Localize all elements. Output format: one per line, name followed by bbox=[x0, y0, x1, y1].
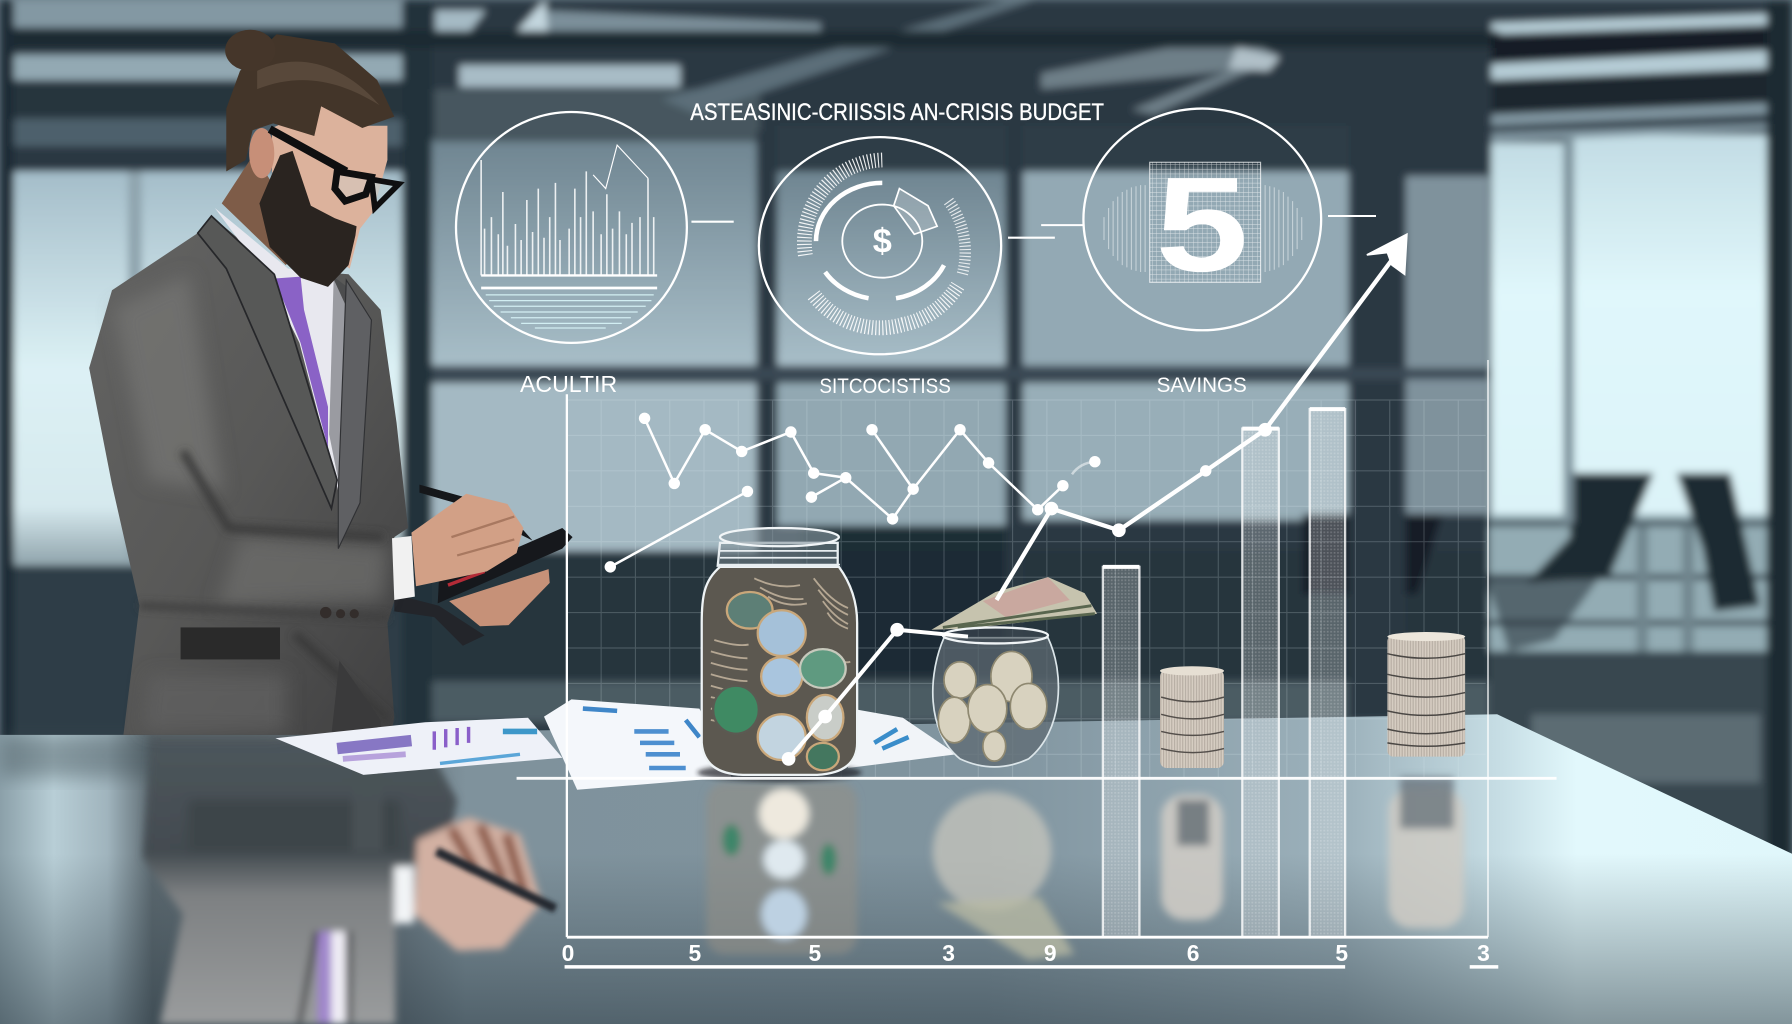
big numeral: 5 bbox=[1155, 149, 1248, 300]
banknotes bbox=[931, 577, 1097, 630]
chairs bbox=[1527, 473, 1654, 583]
lower hand bbox=[449, 569, 550, 626]
chart baseline bbox=[481, 274, 657, 276]
far table silhouettes bbox=[1303, 514, 1442, 594]
line chart: thin series bbox=[605, 413, 1101, 573]
axis numbers: 0 bbox=[562, 940, 574, 966]
table top-left shade bbox=[0, 735, 274, 777]
tie bbox=[270, 277, 328, 448]
hair highlights bbox=[257, 62, 379, 105]
axis numbers: 3 bbox=[1477, 940, 1490, 966]
jacket highlights bbox=[114, 274, 389, 731]
jar coin streaks bbox=[711, 578, 850, 727]
calculator keys bbox=[448, 571, 485, 585]
banknote pink edge bbox=[983, 577, 1070, 617]
jar lid opening bbox=[720, 528, 839, 546]
paper right bbox=[848, 709, 957, 768]
dial ring bbox=[816, 183, 882, 241]
axis numbers: 5 bbox=[1335, 940, 1348, 966]
right top strips bbox=[1491, 14, 1767, 37]
sleeve buttons bbox=[320, 607, 359, 618]
spike bars bbox=[481, 160, 654, 275]
axis numbers: 6 bbox=[1187, 940, 1200, 966]
jacket creases bbox=[139, 451, 389, 720]
icon: glass jar with coins bbox=[697, 528, 862, 782]
hair bbox=[226, 34, 394, 171]
banknote edge lines bbox=[943, 606, 1095, 627]
axis numbers bbox=[562, 940, 1490, 966]
trousers bbox=[331, 661, 381, 735]
ceiling beams centre bbox=[533, 10, 821, 40]
icon: coin stack small bbox=[1160, 666, 1224, 768]
jacket bbox=[89, 216, 408, 735]
columns bbox=[0, 0, 14, 743]
data points bbox=[605, 413, 1101, 573]
hand knuckle shading bbox=[451, 517, 514, 555]
title: ASTEASINIC-CRIISSIS AN-CRISIS BUDGET bbox=[690, 99, 1104, 126]
glasses bbox=[270, 129, 399, 208]
neck bbox=[222, 154, 309, 265]
bar 2 bbox=[1242, 429, 1279, 937]
panel: circle with dollar dial bbox=[759, 137, 1001, 354]
circle label: acultir: ACULTIR bbox=[520, 371, 617, 397]
inner circle bbox=[842, 205, 922, 278]
hand bbox=[411, 494, 523, 586]
panel: circle with bar spikes bbox=[456, 112, 687, 343]
chart axes bbox=[517, 360, 1557, 967]
right floor and rails bbox=[1489, 514, 1769, 654]
reflections of jar, bowl and coins bbox=[706, 777, 1464, 960]
hatched square bbox=[1150, 162, 1261, 282]
table surface bbox=[0, 714, 1792, 1024]
axis numbers: 5 bbox=[688, 940, 701, 966]
side hatching bbox=[1104, 185, 1302, 272]
hatched arcs bbox=[804, 160, 882, 257]
bowl rim bbox=[943, 627, 1048, 643]
panel: man with calculator bbox=[89, 30, 573, 735]
circle label: savings: SAVINGS bbox=[1157, 372, 1247, 397]
shirt bbox=[215, 208, 350, 491]
lapels bbox=[198, 216, 337, 509]
reflected pen bbox=[437, 851, 555, 909]
hair bun bbox=[225, 30, 275, 71]
jar neck bbox=[718, 543, 838, 566]
spike peak line bbox=[593, 145, 648, 189]
beard bbox=[259, 151, 357, 287]
bar chart bbox=[1103, 409, 1345, 937]
cuff bbox=[392, 536, 415, 600]
calculator bbox=[438, 528, 573, 603]
bar 3 bbox=[1310, 409, 1345, 937]
paper left bbox=[275, 718, 562, 775]
paper middle bbox=[544, 699, 731, 790]
ear bbox=[249, 128, 274, 178]
bar 1 bbox=[1103, 567, 1139, 937]
dark lower zone bbox=[432, 551, 1489, 720]
axis numbers: 5 bbox=[808, 940, 821, 966]
pen bbox=[419, 485, 533, 541]
man's far sleeve bbox=[394, 594, 485, 646]
papers on desk bbox=[275, 699, 957, 790]
connector dashes bbox=[691, 216, 1376, 238]
bar caps bbox=[1103, 409, 1345, 567]
jar thread lines bbox=[718, 551, 840, 565]
jar body bbox=[702, 567, 857, 775]
paper printouts bbox=[337, 709, 909, 768]
reflection of man on table bbox=[143, 737, 542, 1024]
dollar sign: $ bbox=[873, 223, 892, 261]
dial wedges bbox=[894, 189, 937, 234]
ripple lines bbox=[481, 287, 657, 289]
axis numbers: 9 bbox=[1044, 940, 1057, 966]
arrow: rising trend line bbox=[782, 234, 1407, 766]
jar coins bbox=[713, 592, 846, 770]
axis numbers: 3 bbox=[942, 940, 955, 966]
circle label: sitcocistiss: SITCOCISTISS bbox=[819, 373, 951, 398]
face bbox=[272, 106, 387, 269]
bowl body bbox=[933, 638, 1058, 767]
bowl coins bbox=[938, 651, 1047, 761]
icon: coin stack large bbox=[1387, 632, 1465, 757]
dark inner jacket bbox=[329, 277, 354, 491]
pocket flap bbox=[181, 627, 280, 659]
panel: circle with number five bbox=[1083, 109, 1321, 330]
chart grid bbox=[567, 400, 1486, 777]
icon: bowl with banknotes bbox=[931, 577, 1097, 767]
jar glass base shadow bbox=[697, 763, 862, 782]
